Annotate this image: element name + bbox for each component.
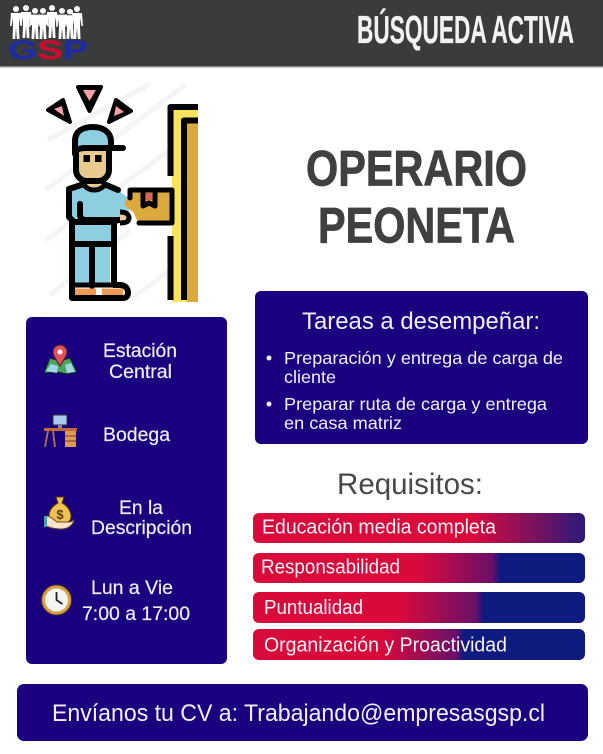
bar: punctuality: Puntualidad [264,597,363,619]
icon: money bag [44,497,74,529]
icon: money bag: $ [56,507,64,522]
requirement bars [253,513,585,660]
salary text: En la [119,497,163,519]
header bar [0,0,603,68]
task 2 [266,394,547,433]
contact banner [17,684,588,741]
salary text [91,497,192,539]
location text [103,340,177,383]
location text: Central [109,361,172,383]
door [170,107,198,302]
task 2: en casa matriz [284,413,402,433]
job title: PEONETA [318,198,515,254]
icon: desk [44,415,77,447]
tasks heading: Tareas a desempeñar: [302,308,540,335]
schedule text: Lun a Vie [91,577,173,599]
schedule text [82,577,190,625]
head [76,146,109,181]
bar: responsibility: Responsabilidad [261,556,400,578]
logo: GSP: GSP [8,34,88,65]
bar: punctuality [253,592,585,623]
bar: organization: Organización y Proactividad [264,634,507,656]
job title [306,140,527,254]
task 2: Preparar ruta de carga y entrega [284,394,547,414]
warning triangles [48,87,131,122]
icon: map pin [44,345,77,374]
panel: tasks [255,291,588,444]
bar: responsibility [253,553,585,583]
task 1: Preparación y entrega de carga de [284,348,563,368]
task 1: cliente [284,367,336,387]
legs and shoes [75,222,113,242]
bar: education [253,513,585,543]
contact banner: Envíanos tu CV a: Trabajando@empresasgsp.cl [52,700,545,727]
requirements heading: Requisitos: [337,468,483,501]
schedule text: 7:00 a 17:00 [82,603,190,625]
torso [68,184,130,219]
location text: Estación [103,340,177,362]
bar: education: Educación media completa [262,516,497,538]
workplace text: Bodega [103,424,170,446]
bar: organization [253,629,585,660]
parcel [120,190,172,223]
illustration: delivery worker [46,84,198,302]
worker [68,127,130,298]
task 1 [266,348,563,387]
icon: clock [42,585,72,615]
logo: GSP [8,5,88,65]
salary text: Descripción [91,517,192,539]
panel: job details [26,317,227,664]
job title: OPERARIO [306,140,527,196]
